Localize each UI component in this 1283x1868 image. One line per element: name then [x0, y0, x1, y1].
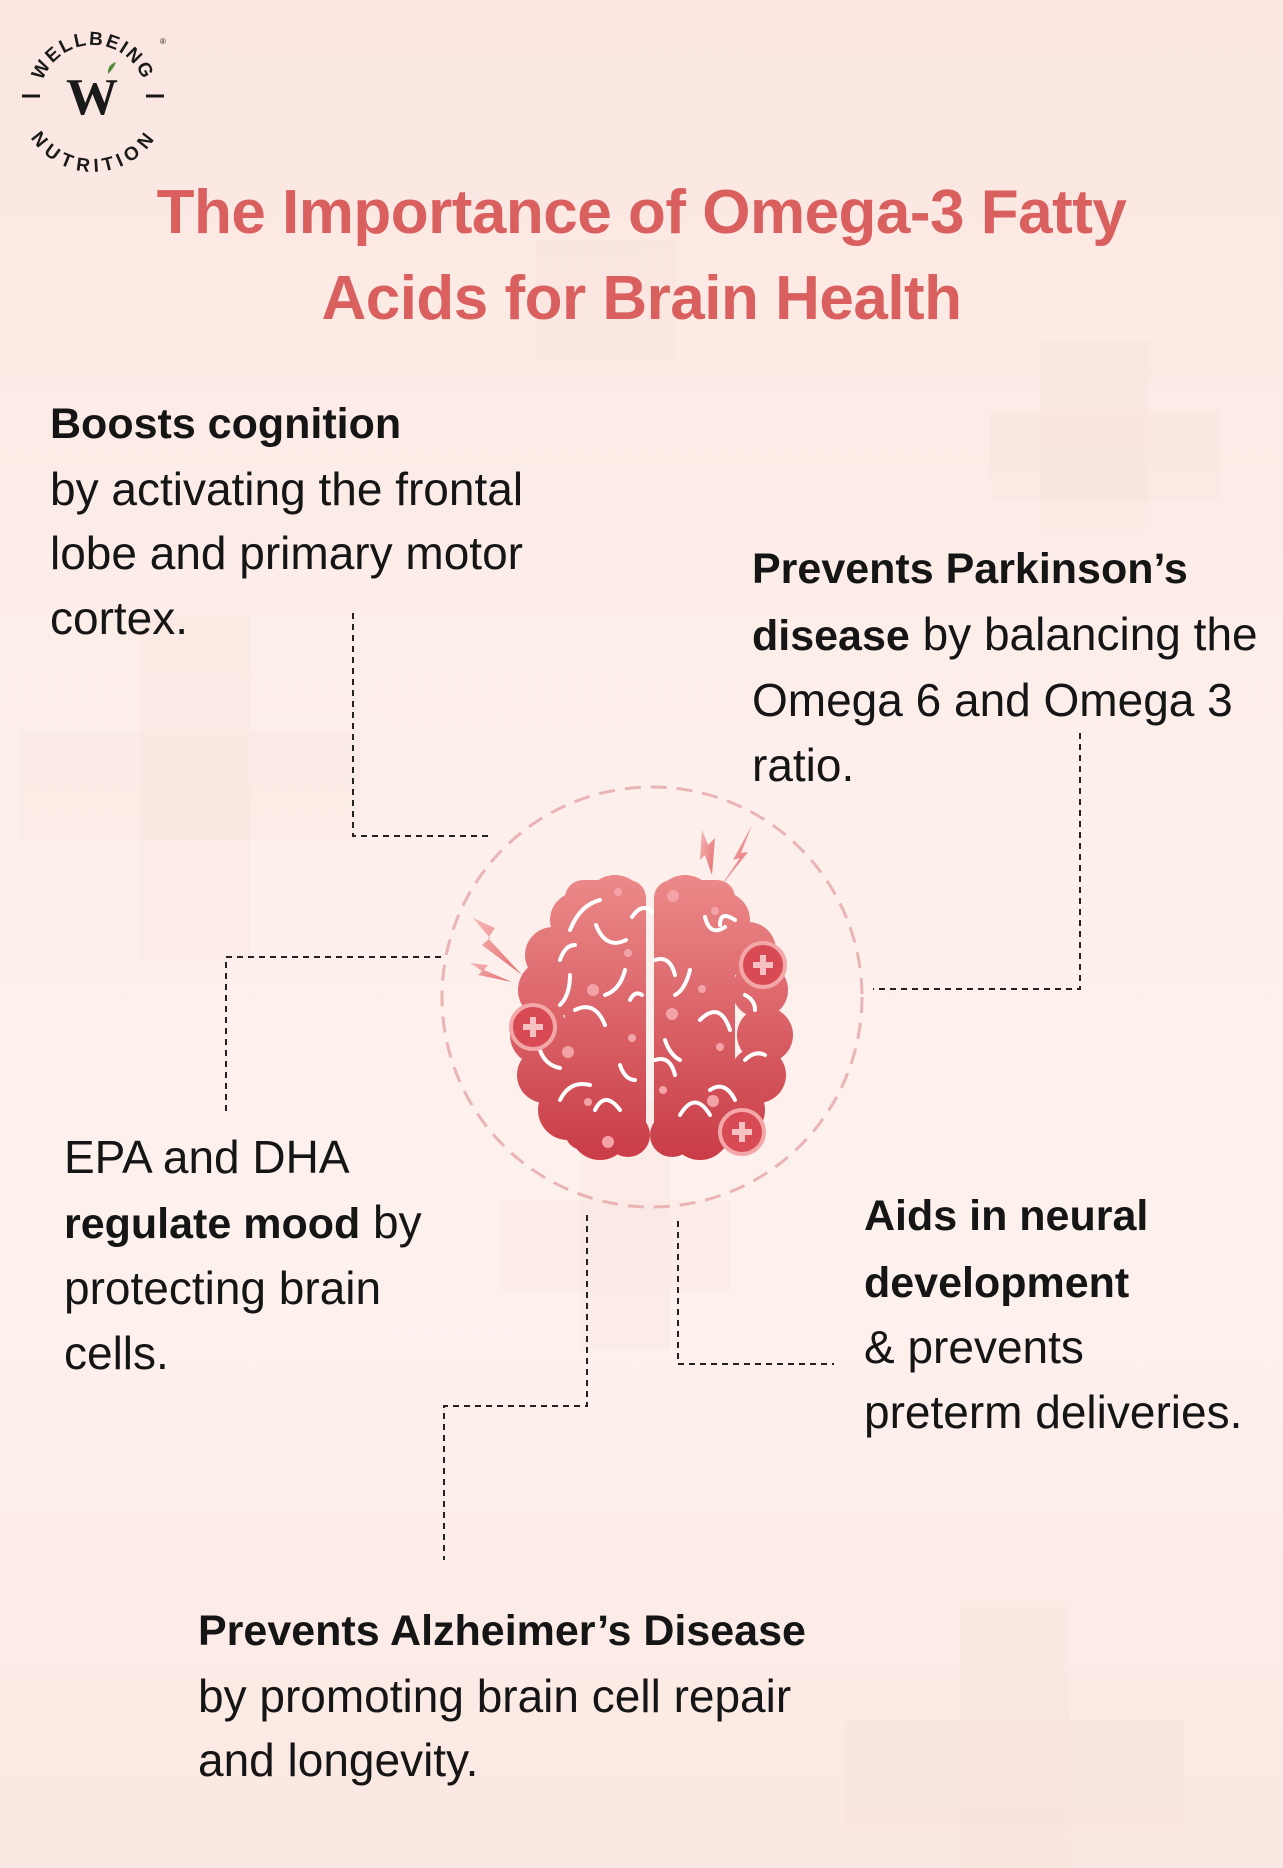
- text: parkinson's: disease by balancing the: [752, 608, 1258, 660]
- text: neural development: preterm deliveries.: [864, 1386, 1242, 1438]
- text: alzheimer's: and longevity.: [198, 1734, 478, 1786]
- title: The Importance of Omega-3 Fatty: [157, 178, 1126, 247]
- text: alzheimer's: Prevents Alzheimer’s Disease: [198, 1607, 806, 1655]
- icon: lightning bolts: [470, 825, 752, 982]
- text: neural development: development: [864, 1258, 1129, 1306]
- logo: W: [66, 69, 118, 126]
- brain dots: [562, 888, 724, 1148]
- logo: [22, 32, 166, 172]
- text: mood: EPA and DHA: [64, 1131, 350, 1183]
- icon: plus badges: [511, 943, 785, 1154]
- logo: WELLBEING: [30, 32, 152, 78]
- text: mood: regulate mood by: [64, 1196, 422, 1248]
- text: neural development: [864, 1192, 1242, 1438]
- text: boosts cognition: [50, 400, 523, 644]
- text: neural development: & prevents: [864, 1321, 1084, 1373]
- text: boosts cognition: cortex.: [50, 592, 188, 644]
- text: neural development: Aids in neural: [864, 1192, 1148, 1240]
- right hemisphere: [650, 875, 793, 1160]
- text: boosts cognition: lobe and primary motor: [50, 527, 523, 579]
- brain folds: [540, 900, 765, 1115]
- text: mood: protecting brain: [64, 1262, 381, 1314]
- title: Acids for Brain Health: [321, 264, 962, 333]
- text: alzheimer's: by promoting brain cell repair: [198, 1670, 791, 1722]
- title: [157, 178, 1126, 333]
- text: parkinson's: ratio.: [752, 738, 854, 790]
- text: parkinson's: Omega 6 and Omega 3: [752, 674, 1233, 726]
- text: parkinson's: [752, 545, 1258, 790]
- text: boosts cognition: Boosts cognition: [50, 400, 401, 448]
- text: boosts cognition: by activating the frontal: [50, 462, 523, 514]
- left hemisphere: [510, 875, 650, 1160]
- text: alzheimer's: [198, 1607, 806, 1786]
- text: parkinson's: Prevents Parkinson’s: [752, 545, 1188, 593]
- dashed circle: [442, 787, 862, 1207]
- text: mood: cells.: [64, 1326, 169, 1378]
- text: mood: [64, 1131, 422, 1378]
- logo: ®: [160, 37, 166, 46]
